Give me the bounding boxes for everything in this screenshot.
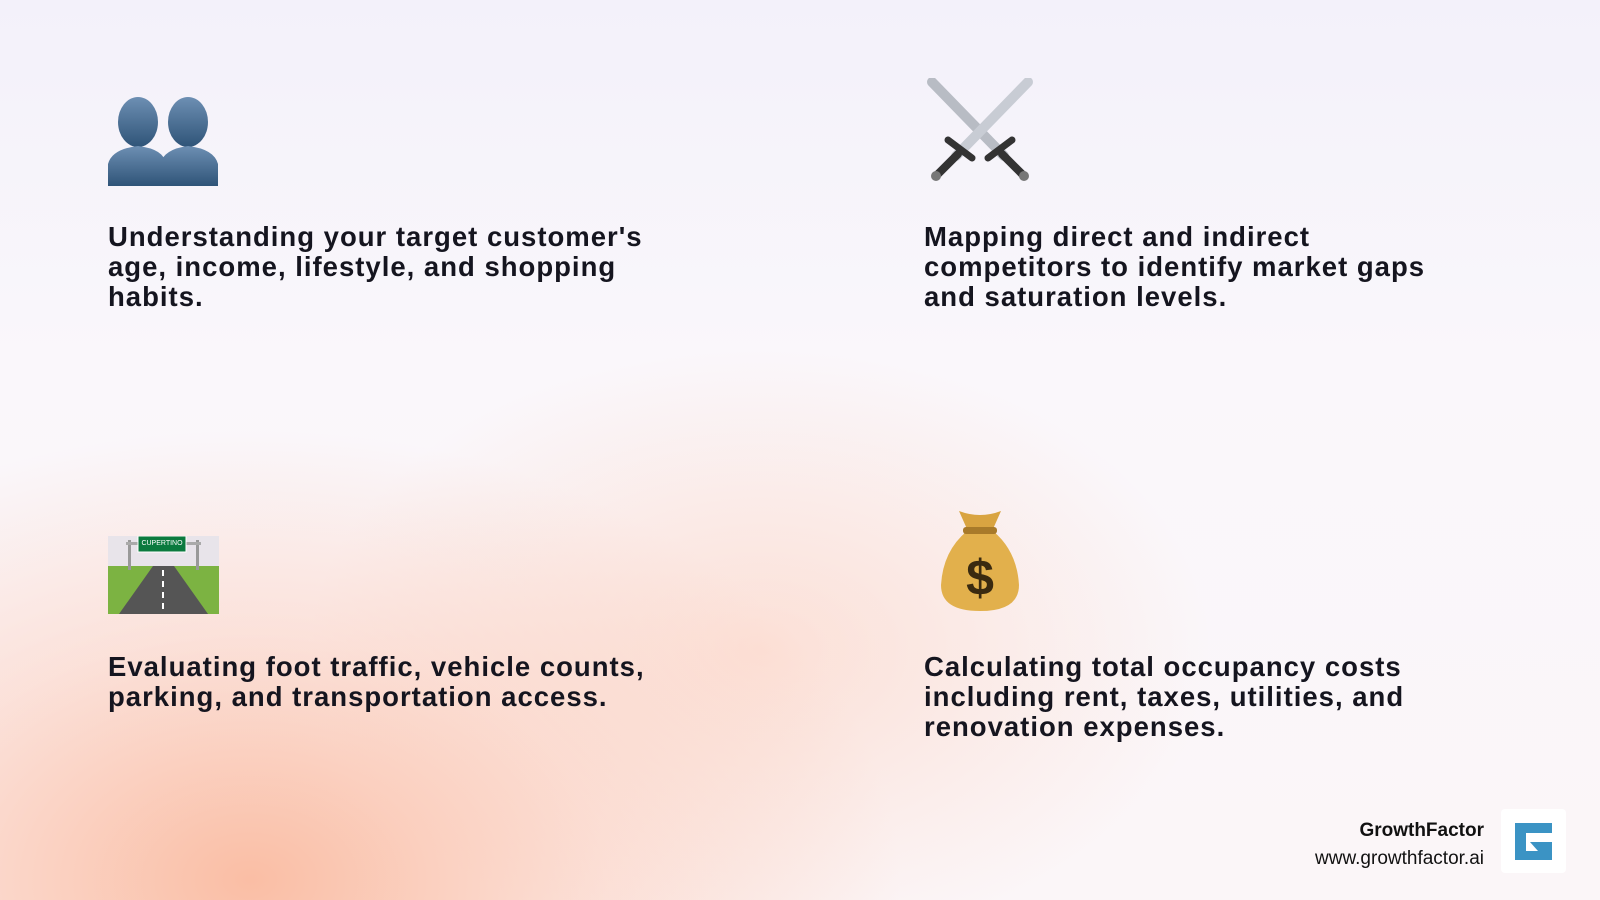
text: customer: Understanding your target customer's bbox=[108, 221, 643, 252]
text: competitors: Mapping direct and indirect bbox=[924, 221, 1310, 252]
brand: www.growthfactor.ai bbox=[1315, 848, 1484, 869]
text: costs: including rent, taxes, utilities, and bbox=[924, 681, 1404, 712]
text: competitors: and saturation levels. bbox=[924, 281, 1227, 312]
icon: silhouettes bbox=[108, 97, 218, 186]
text: traffic bbox=[108, 651, 645, 712]
text: traffic: parking, and transportation access. bbox=[108, 681, 608, 712]
text: costs: Calculating total occupancy costs bbox=[924, 651, 1402, 682]
text: customer bbox=[108, 221, 643, 312]
icon: motorway: CUPERTINO bbox=[141, 540, 183, 547]
text: costs: renovation expenses. bbox=[924, 711, 1225, 742]
icon: motorway bbox=[108, 536, 219, 614]
text: competitors bbox=[924, 221, 1425, 312]
text: customer: habits. bbox=[108, 281, 204, 312]
text: costs bbox=[924, 651, 1404, 742]
icon: money bag bbox=[941, 511, 1019, 611]
icon: money bag: $ bbox=[966, 550, 994, 606]
brand: GrowthFactor bbox=[1359, 820, 1484, 841]
text: customer: age, income, lifestyle, and shopping bbox=[108, 251, 616, 282]
brand bbox=[1315, 820, 1484, 869]
text: competitors: competitors to identify market gaps bbox=[924, 251, 1425, 282]
text: traffic: Evaluating foot traffic, vehicle counts, bbox=[108, 651, 645, 682]
icon: crossed swords bbox=[927, 78, 1033, 181]
logo bbox=[1501, 809, 1566, 873]
